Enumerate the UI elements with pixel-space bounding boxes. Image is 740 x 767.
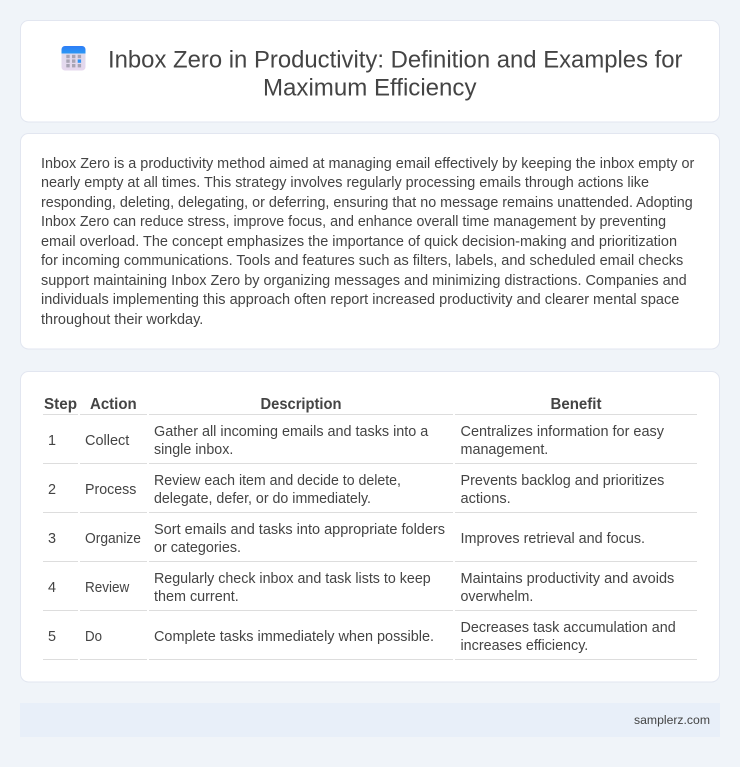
row 1: Collect [85,433,129,449]
text block: definition paragraph: support maintaining Inbox Zero by organizing messages and minimizing distractions. Companies and [41,273,687,289]
row 2: delegate, defer, or do immediately. [154,491,371,507]
text block: definition paragraph: individuals implementing this approach often report increased productivity and clearer mental space [41,292,679,308]
table header: Benefit [550,396,602,413]
row 1: Centralizes information for easy [460,424,665,440]
row 4: Review [85,580,130,596]
row 3: Sort emails and tasks into appropriate folders [154,522,445,538]
row 2: Prevents backlog and prioritizes [460,473,664,489]
row 1: management. [460,442,548,458]
row 2: Process [85,482,136,498]
row 2: actions. [460,491,511,507]
table header [43,396,697,415]
text block: definition paragraph: Inbox Zero is a productivity method aimed at managing email effectively by keeping the inbox empty or [41,156,694,172]
text block: definition paragraph: throughout their workday. [41,312,203,328]
footer bar [20,703,720,737]
row 4: Regularly check inbox and task lists to keep [154,571,431,587]
table header: Step [44,396,77,413]
title [108,46,683,102]
text block: definition paragraph: email overload. The concept emphasizes the importance of quick decision-making and prioritization [41,234,677,250]
row 3: 3 [48,531,56,547]
text block: definition paragraph: for incoming communications. Tools and features such as filters, labels, and scheduled email checks [41,253,683,269]
title: Maximum Efficiency [263,74,476,102]
row 3 [43,522,697,562]
text block: definition paragraph [41,156,694,328]
row 4: 4 [48,580,56,596]
row 4 [43,571,697,611]
row 5: Do [85,629,102,645]
row 5: increases efficiency. [460,638,588,654]
row 2 [43,473,697,513]
footer text: samplerz.com [634,713,710,727]
panel: steps table [20,372,720,682]
row 4: them current. [154,589,239,605]
row 3: Improves retrieval and focus. [460,531,645,547]
row 3: or categories. [154,540,241,556]
row 2: 2 [48,482,56,498]
panel: title header [20,20,720,122]
text block: definition paragraph: responding, deleting, delegating, or deferring, ensuring that no message remains unattended. Adopting [41,195,693,211]
row 1: single inbox. [154,442,233,458]
table header: Description [260,396,342,413]
row 5: Complete tasks immediately when possible. [154,629,434,645]
row 1: 1 [48,433,56,449]
row 4: overwhelm. [460,589,533,605]
row 3: Organize [85,531,141,547]
row 5: 5 [48,629,56,645]
row 1 [43,424,697,464]
row 5: Decreases task accumulation and [460,620,676,636]
text block: definition paragraph: Inbox Zero can reduce stress, improve focus, and enhance overall time management by preventing [41,214,666,230]
panel: definition text [20,134,720,349]
table header: Action [90,396,137,413]
row 4: Maintains productivity and avoids [460,571,674,587]
row 2: Review each item and decide to delete, [154,473,401,489]
text block: definition paragraph: nearly empty at all times. This strategy involves regularly processing emails through actions like [41,175,649,191]
title: Inbox Zero in Productivity: Definition and Examples for [108,46,683,74]
row 1: Gather all incoming emails and tasks into a [154,424,428,440]
icon: calendar [62,46,86,70]
row 5 [43,620,697,660]
